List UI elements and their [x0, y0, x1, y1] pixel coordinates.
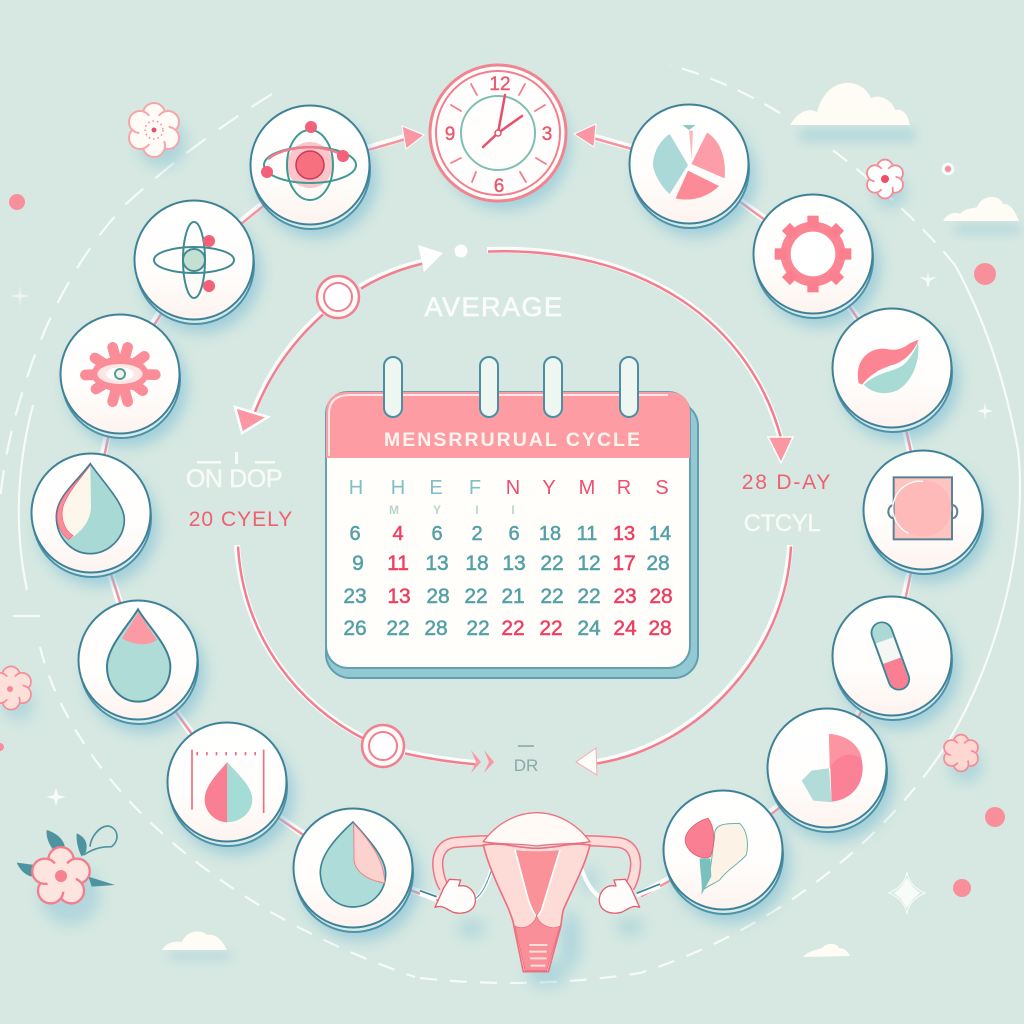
calendar numbers: 24 — [577, 617, 601, 640]
calendar numbers: 22 — [539, 617, 563, 640]
small pink blossoms — [0, 166, 1005, 897]
sparkles — [11, 272, 993, 914]
calendar numbers: 11 — [387, 552, 409, 575]
calendar day headers: M — [389, 503, 399, 517]
label tick marks — [197, 452, 534, 747]
node: eye flower — [60, 314, 187, 447]
calendar numbers: 18 — [465, 552, 489, 575]
calendar day headers: N — [506, 477, 520, 499]
calendar numbers: 6 — [508, 523, 520, 545]
calendar numbers: 28 — [646, 552, 670, 575]
calendar — [326, 357, 698, 678]
node: droplet in frame — [168, 722, 294, 855]
node: droplet half pink — [32, 454, 158, 586]
calendar numbers: 4 — [392, 523, 404, 545]
side labels: DR — [514, 756, 538, 775]
calendar numbers: 24 — [613, 617, 637, 640]
node: square with circle — [864, 450, 990, 583]
calendar numbers: 28 — [426, 585, 450, 608]
calendar day headers: M — [579, 477, 595, 499]
calendar day headers: H — [349, 477, 363, 499]
calendar numbers — [343, 523, 673, 640]
calendar numbers: 13 — [613, 523, 635, 545]
ring marker top — [317, 276, 359, 318]
calendar numbers: 2 — [471, 523, 483, 545]
node: atom 1 — [250, 106, 377, 238]
calendar numbers: 14 — [649, 523, 671, 545]
clock: 12 — [489, 74, 511, 95]
side labels: 20 CYELY — [189, 508, 293, 531]
calendar day headers — [349, 477, 669, 517]
flower: right — [944, 735, 982, 782]
calendar numbers: 22 — [540, 585, 564, 608]
calendar numbers: 28 — [424, 617, 448, 640]
side labels: CTCYL — [744, 510, 820, 537]
calendar day headers: Y — [433, 503, 441, 517]
calendar day headers: I — [475, 503, 479, 517]
calendar numbers: 22 — [466, 617, 490, 640]
flower: top left — [129, 103, 186, 167]
calendar numbers: 23 — [613, 585, 637, 608]
flower: lower left — [17, 826, 117, 925]
connectors between nodes — [91, 136, 924, 902]
clock — [430, 65, 570, 210]
calendar day headers: I — [511, 503, 515, 517]
calendar day headers: E — [429, 477, 443, 499]
calendar numbers: 22 — [386, 617, 410, 640]
node: half pie — [768, 708, 894, 841]
clock: 9 — [445, 124, 455, 145]
calendar numbers: 23 — [343, 585, 367, 608]
node: atom 2 — [134, 200, 261, 333]
calendar day headers: H — [391, 477, 405, 499]
node: organ swirl — [832, 308, 959, 441]
node: droplet pink cap — [78, 600, 205, 733]
calendar numbers: 28 — [649, 585, 673, 608]
side labels: 28 D-AY — [742, 471, 832, 494]
side labels — [186, 292, 832, 775]
uterus — [420, 813, 660, 987]
clock: 6 — [494, 176, 504, 197]
node: gear — [754, 194, 880, 327]
flower: left — [0, 666, 34, 720]
clock: 3 — [542, 124, 552, 145]
calendar numbers: 18 — [539, 523, 561, 545]
calendar rings — [384, 357, 638, 417]
calendar numbers: 22 — [501, 617, 525, 640]
calendar numbers: 13 — [502, 552, 526, 575]
side labels: ON DOP — [186, 465, 282, 493]
calendar day headers: S — [655, 477, 669, 499]
calendar numbers: 22 — [540, 552, 564, 575]
calendar day headers: Y — [542, 477, 556, 499]
calendar numbers: 6 — [431, 523, 443, 545]
calendar title: MENSRRURUAL CYCLE — [384, 429, 642, 451]
calendar numbers: 26 — [343, 617, 367, 640]
clouds — [162, 83, 1020, 960]
calendar numbers: 9 — [352, 552, 364, 575]
calendar day headers: F — [469, 477, 481, 499]
calendar numbers: 17 — [612, 552, 636, 575]
calendar numbers: 22 — [464, 585, 488, 608]
calendar numbers: 13 — [425, 552, 449, 575]
calendar day headers: R — [617, 477, 631, 499]
calendar numbers: 12 — [577, 552, 601, 575]
flower: upper right — [867, 160, 906, 208]
node: flower bud — [664, 790, 790, 923]
calendar numbers: 6 — [349, 523, 361, 545]
calendar numbers: 22 — [577, 585, 601, 608]
calendar numbers: 13 — [387, 585, 411, 608]
ring marker bottom — [362, 725, 404, 767]
calendar numbers: 21 — [501, 585, 525, 608]
inner cycle arrows — [237, 250, 791, 767]
side labels: AVERAGE — [424, 292, 564, 322]
arrow heads — [235, 244, 793, 775]
node: pie chart — [630, 104, 756, 237]
small white dot — [943, 164, 953, 174]
node: pill — [832, 596, 959, 729]
calendar numbers: 11 — [577, 523, 597, 545]
arrow heads near clock — [402, 124, 596, 149]
calendar numbers: 28 — [648, 617, 672, 640]
node: droplet teal and blush — [294, 808, 420, 941]
